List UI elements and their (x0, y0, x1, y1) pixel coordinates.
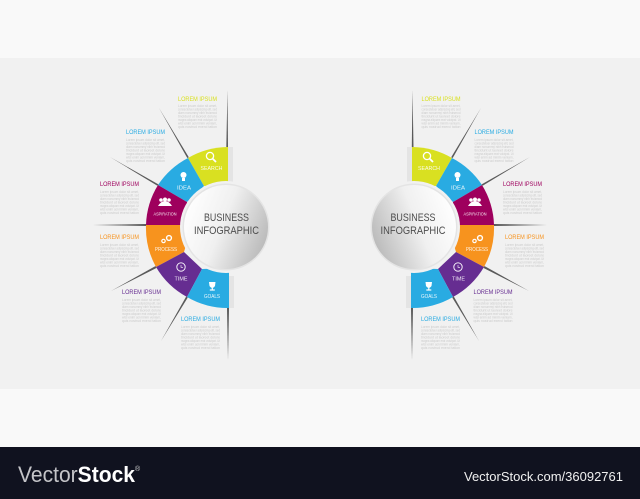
text block: left idea: LOREM IPSUM (126, 129, 165, 136)
icon: gears (473, 236, 482, 243)
text block: left time: LOREM IPSUM (122, 289, 161, 296)
text block: right process: diam nonummy nibh euismod (505, 250, 544, 254)
text block: right goals: Lorem ipsum dolor sit amet, (421, 325, 460, 329)
text block: left idea: wisi enim ad minim veniam, (126, 156, 165, 160)
text block: left aspiration: tincidunt ut laoreet dolore (100, 200, 139, 204)
text block: left process (100, 234, 139, 268)
text block: left process: quis nostrud exerci tation (100, 264, 139, 268)
text block: right idea: wisi enim ad minim veniam, (474, 156, 514, 160)
left segment labels: GOALS (204, 294, 220, 300)
text block: right process: wisi enim ad minim veniam, (505, 260, 544, 264)
text block: left search: quis nostrud exerci tation (178, 125, 217, 129)
left segment: search (188, 147, 228, 186)
text block: left goals: tincidunt ut laoreet dolore (181, 336, 220, 340)
icon: search (206, 152, 216, 162)
text block: right process: magna aliquam erat volutpat. Ut (505, 257, 544, 261)
text block: right time: consectetuer adipiscing elit, sed (474, 302, 513, 306)
text block: left goals: Lorem ipsum dolor sit amet, (181, 325, 220, 329)
icon: gears (162, 236, 171, 243)
text block: left time: diam nonummy nibh euismod (122, 305, 161, 309)
left hub (180, 181, 272, 273)
left wheel (93, 90, 272, 360)
text block: left goals (181, 316, 220, 350)
text block: right goals: tincidunt ut laoreet dolore (421, 336, 460, 340)
icon: trophy (426, 282, 432, 291)
left hub: INFOGRAPHIC (194, 225, 259, 237)
text block: left process: consectetuer adipiscing elit, sed (100, 246, 139, 250)
text block: left idea: tincidunt ut laoreet dolore (126, 148, 165, 152)
text block: right aspiration: consectetuer adipiscing elit, sed (503, 194, 542, 198)
text block: left process: wisi enim ad minim veniam, (100, 260, 139, 264)
background: top band (0, 0, 640, 58)
left segment labels: ASPIRATION (154, 212, 176, 216)
left segment labels: IDEA (177, 186, 191, 192)
right segment labels (418, 166, 488, 300)
text block: right goals: wisi enim ad minim veniam, (421, 342, 460, 346)
left segment labels: TIME (174, 276, 188, 282)
text block: right goals: magna aliquam erat volutpat. Ut (421, 339, 460, 343)
text block: left aspiration: diam nonummy nibh euismod (100, 197, 139, 201)
text block: right search: diam nonummy nibh euismod (422, 111, 461, 115)
right hub: INFOGRAPHIC (380, 225, 446, 237)
left segment: aspiration (146, 185, 192, 225)
text block: right time: LOREM IPSUM (474, 289, 512, 296)
text block: left time: tincidunt ut laoreet dolore (122, 308, 161, 312)
text block: left aspiration: LOREM IPSUM (100, 181, 139, 188)
text block: left search: tincidunt ut laoreet dolore (178, 114, 217, 118)
text block: right goals: diam nonummy nibh euismod (421, 332, 460, 336)
text block: left idea: quis nostrud exerci tation (126, 159, 165, 163)
icon: trophy (209, 282, 216, 291)
text block: right idea: diam nonummy nibh euismod (474, 145, 514, 149)
right segment labels: PROCESS (466, 247, 488, 253)
text block: right process: quis nostrud exerci tation (505, 264, 544, 268)
text block: left process: diam nonummy nibh euismod (100, 250, 139, 254)
text block: right search: tincidunt ut laoreet dolore (422, 114, 461, 118)
text block: right goals (421, 316, 460, 350)
text block: left time: wisi enim ad minim veniam, (122, 316, 161, 320)
text block: left process: LOREM IPSUM (100, 234, 139, 241)
left hub: BUSINESS (204, 212, 249, 224)
text block: right process: LOREM IPSUM (505, 234, 544, 241)
text block: left time: quis nostrud exerci tation (122, 319, 161, 323)
text block: right idea: Lorem ipsum dolor sit amet, (474, 138, 514, 142)
text block: right process: tincidunt ut laoreet dolore (505, 254, 544, 258)
footer logo: VectorStock (18, 462, 136, 487)
footer url: VectorStock.com/36092761 (464, 470, 623, 484)
background: lower band (0, 389, 640, 447)
text block: right idea: quis nostrud exerci tation (474, 159, 514, 163)
text block: right aspiration (503, 181, 542, 215)
text block: right goals: LOREM IPSUM (421, 316, 460, 323)
right segment: idea (436, 158, 482, 202)
text block: right process: consectetuer adipiscing elit, sed (505, 246, 544, 250)
text block: right aspiration: diam nonummy nibh euismod (503, 197, 542, 201)
left rays (93, 90, 229, 360)
right hub: BUSINESS (390, 212, 436, 224)
icon: clock (454, 263, 462, 271)
right hub (368, 181, 460, 273)
icon: people (468, 198, 482, 206)
right segment: aspiration (448, 185, 494, 225)
text block: left search: wisi enim ad minim veniam, (178, 122, 217, 126)
text block: right idea: magna aliquam erat volutpat. Ut (474, 152, 514, 156)
text block: left time: consectetuer adipiscing elit, sed (122, 302, 161, 306)
text block: left search: LOREM IPSUM (178, 96, 217, 103)
text block: left process: magna aliquam erat volutpat. Ut (100, 257, 139, 261)
text block: right time (474, 289, 513, 323)
text block: left search: consectetuer adipiscing elit, sed (178, 108, 217, 112)
right segment labels: GOALS (421, 294, 437, 300)
left shadow strips (228, 147, 234, 308)
text block: left time: magna aliquam erat volutpat. Ut (122, 312, 161, 316)
text block: left search (178, 96, 217, 129)
text block: left goals: wisi enim ad minim veniam, (181, 342, 220, 346)
text block: right search: quis nostrud exerci tation (422, 125, 461, 129)
background: main panel (0, 58, 640, 389)
left segment: time (156, 252, 202, 297)
right segment: search (412, 147, 452, 186)
text block: right time: wisi enim ad minim veniam, (474, 316, 513, 320)
text block: left aspiration: magna aliquam erat volutpat. Ut (100, 204, 139, 208)
text block: left goals: quis nostrud exerci tation (181, 346, 220, 350)
icon: bulb (454, 172, 460, 181)
text block: right time: magna aliquam erat volutpat. Ut (474, 312, 513, 316)
left segment: process (146, 225, 192, 267)
text block: left search: magna aliquam erat volutpat. Ut (178, 118, 217, 122)
right segment labels: ASPIRATION (464, 212, 486, 216)
text block: left aspiration: Lorem ipsum dolor sit amet, (100, 190, 139, 194)
text block: right search (422, 96, 461, 129)
right segment labels: TIME (452, 276, 465, 282)
text block: right process: Lorem ipsum dolor sit amet, (505, 243, 544, 247)
text block: left process: Lorem ipsum dolor sit amet, (100, 243, 139, 247)
right wheel (368, 90, 547, 360)
text block: right idea (474, 129, 514, 163)
text block: right aspiration: quis nostrud exerci tation (503, 211, 542, 215)
left segment labels (154, 166, 222, 300)
text block: right aspiration: LOREM IPSUM (503, 181, 542, 188)
left segment labels: SEARCH (200, 166, 222, 172)
right icons (423, 152, 482, 291)
right shadow strips (406, 147, 412, 308)
text block: right search: consectetuer adipiscing elit, sed (422, 108, 461, 112)
text block: left search: diam nonummy nibh euismod (178, 111, 217, 115)
footer bar (0, 447, 640, 499)
right rays (411, 90, 547, 360)
left segment labels: PROCESS (155, 247, 177, 253)
text block: left time: Lorem ipsum dolor sit amet, (122, 298, 161, 302)
text block: left goals: magna aliquam erat volutpat. Ut (181, 339, 220, 343)
text block: right idea: consectetuer adipiscing elit, sed (474, 142, 514, 146)
text block: right aspiration: magna aliquam erat volutpat. Ut (503, 204, 542, 208)
text block: right aspiration: Lorem ipsum dolor sit amet, (503, 190, 542, 194)
text block: right time: diam nonummy nibh euismod (474, 305, 513, 309)
text block: left time (122, 289, 161, 323)
right segment: process (448, 225, 494, 267)
text block: left goals: diam nonummy nibh euismod (181, 332, 220, 336)
text block: left idea: diam nonummy nibh euismod (126, 145, 165, 149)
left segment: idea (158, 158, 204, 202)
text block: left idea: magna aliquam erat volutpat. Ut (126, 152, 165, 156)
text block: left goals: LOREM IPSUM (181, 316, 220, 323)
right segment labels: IDEA (451, 186, 465, 192)
text block: left aspiration: wisi enim ad minim veniam, (100, 208, 139, 212)
text block: right search: wisi enim ad minim veniam, (422, 122, 461, 126)
left segment: goals (187, 268, 229, 308)
text block: right aspiration: wisi enim ad minim veniam, (503, 208, 542, 212)
text block: right goals: quis nostrud exerci tation (421, 346, 460, 350)
icon: bulb (180, 172, 186, 181)
text block: right goals: consectetuer adipiscing elit, sed (421, 328, 460, 332)
text block: right aspiration: tincidunt ut laoreet dolore (503, 200, 542, 204)
text block: right idea: LOREM IPSUM (474, 129, 514, 136)
text block: right process (505, 234, 544, 268)
text block: left aspiration: consectetuer adipiscing elit, sed (100, 194, 139, 198)
left icons (158, 152, 216, 291)
text block: left aspiration (100, 181, 139, 215)
text block: right search: Lorem ipsum dolor sit amet, (422, 104, 461, 108)
right segment labels: SEARCH (418, 166, 440, 172)
text block: right time: Lorem ipsum dolor sit amet, (474, 298, 513, 302)
text block: right time: quis nostrud exerci tation (474, 319, 513, 323)
text block: left goals: consectetuer adipiscing elit, sed (181, 328, 220, 332)
text block: left process: tincidunt ut laoreet dolore (100, 254, 139, 258)
icon: people (158, 198, 172, 206)
icon: search (423, 152, 433, 162)
right segment: goals (411, 268, 453, 308)
icon: clock (177, 263, 185, 271)
text block: left idea: consectetuer adipiscing elit, sed (126, 142, 165, 146)
text block: left idea: Lorem ipsum dolor sit amet, (126, 138, 165, 142)
text block: right idea: tincidunt ut laoreet dolore (474, 148, 514, 152)
text block: left idea (126, 129, 165, 163)
text block: right search: LOREM IPSUM (422, 96, 460, 103)
text block: right search: magna aliquam erat volutpat. Ut (422, 118, 461, 122)
footer registered mark: ® (135, 465, 141, 473)
text block: right time: tincidunt ut laoreet dolore (474, 308, 513, 312)
right segment: time (438, 252, 484, 297)
text block: left search: Lorem ipsum dolor sit amet, (178, 104, 217, 108)
text block: left aspiration: quis nostrud exerci tation (100, 211, 139, 215)
